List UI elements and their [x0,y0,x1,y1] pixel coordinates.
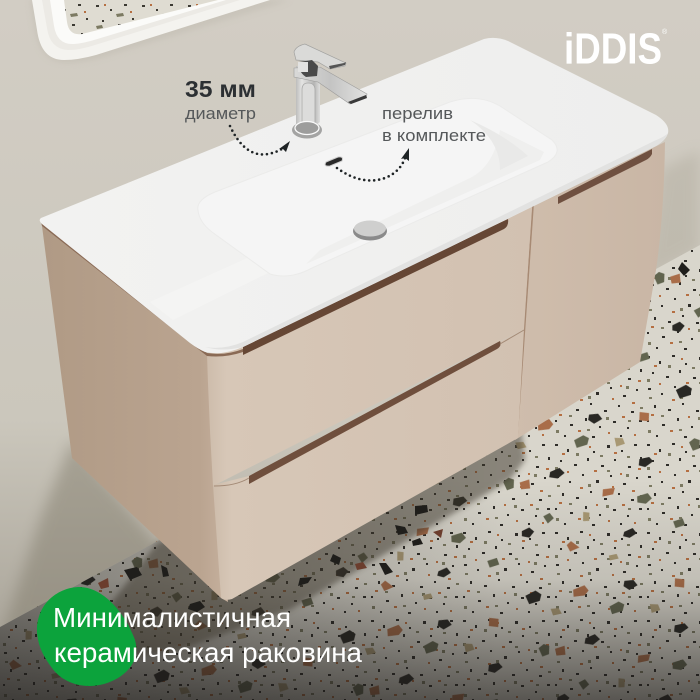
callout: overflow included: перелив [382,104,453,123]
heading: керамическая раковина [54,637,362,668]
sink bowl upper reflection [470,120,528,170]
cabinet side panel [42,226,228,602]
overflow [325,157,342,166]
arrow: from overflow [337,148,409,180]
callout: overflow included [382,104,486,145]
faucet lever [294,44,346,69]
right door [515,142,665,440]
faucet base ring [292,122,322,138]
door handle recess [558,149,652,204]
lever underside [329,62,346,69]
heading [53,602,362,668]
wall shadow left of cabinet [0,440,170,640]
sink bowl inner [306,130,544,264]
counter ledge band [150,258,270,320]
lower drawer [213,329,524,600]
drawer gap line [214,330,524,486]
faucet tube [296,66,320,127]
floor [0,245,700,700]
callout: overflow included: в комплекте [382,126,486,145]
cabinet floor shadow [60,420,525,670]
counter left underside edge [41,222,243,356]
callout: 35 mm diameter: 35 мм [185,76,256,102]
upper drawer [207,206,532,486]
wall shadow right of cabinet [645,150,700,280]
logo: ® [662,28,668,36]
faucet spout [294,67,367,104]
upper drawer handle [243,219,508,355]
counter surface [40,38,668,353]
callout: 35 mm diameter: диаметр [185,104,256,123]
faucet dark hinge [299,60,318,77]
counter front lip [205,133,668,350]
arrow: to faucet hole [230,126,290,154]
heading: Минималистичная [53,602,291,633]
green blob [37,587,136,686]
drain [353,220,387,240]
faucet spout mouth [348,95,367,104]
faucet [292,44,367,138]
large floor chips near cabinet [124,262,690,612]
sink bowl [198,98,557,276]
mirror [30,0,290,63]
ceramic basin top [40,38,668,356]
faucet glass panel [302,83,315,124]
cabinet [42,142,665,602]
door gap [517,206,533,438]
callout: 35 mm diameter [185,76,256,123]
logo: iDDIS [564,24,662,74]
lower drawer handle [249,341,501,484]
